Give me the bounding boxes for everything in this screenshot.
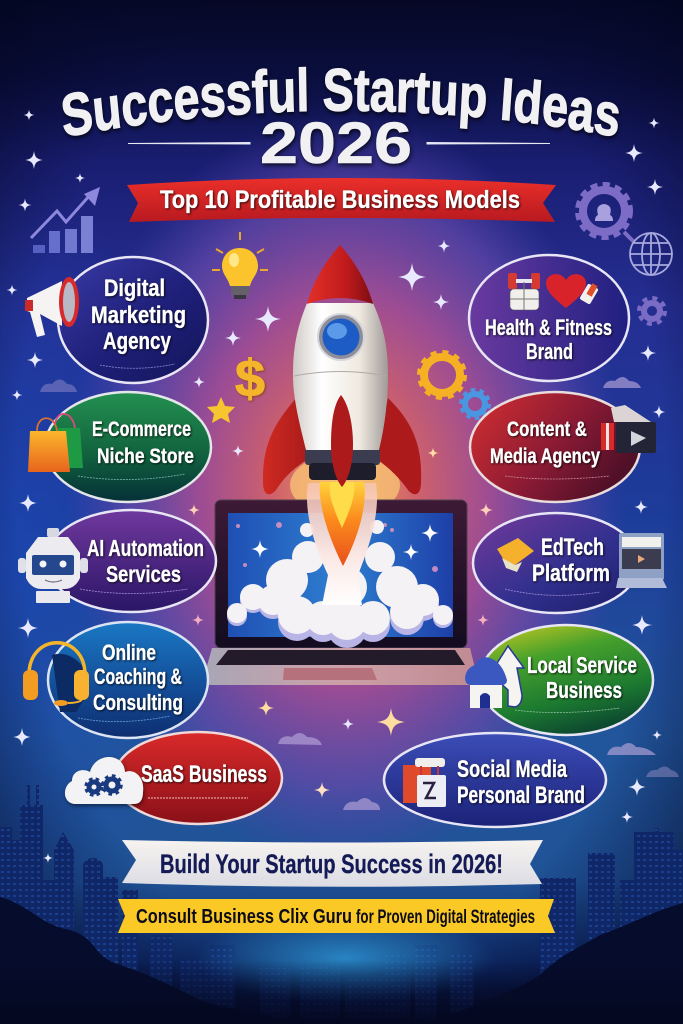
closing ribbon: Build Your Startup Success in 2026! — [160, 849, 503, 879]
item: Social Media Personal Brand — [384, 733, 606, 827]
laptop screen — [215, 500, 467, 648]
rocket — [263, 245, 421, 494]
item: Health & Fitness Brand: Brand — [526, 339, 573, 364]
item: Content & Media Agency: Media Agency — [490, 445, 600, 468]
rocket porthole — [318, 314, 364, 360]
rocket body — [293, 303, 388, 450]
city skyline — [0, 785, 683, 1024]
decorative clouds — [40, 377, 679, 810]
item: EdTech Platform: EdTech — [541, 534, 604, 561]
rocket nose — [307, 245, 373, 304]
glow below banners — [195, 913, 495, 1003]
icon: house — [465, 646, 524, 708]
item: E-Commerce Niche Store: Niche Store — [97, 445, 194, 468]
item: AI Automation Services: Services — [106, 561, 181, 587]
exhaust column — [307, 483, 377, 605]
call to action ribbon: for Proven Digital Strategies — [356, 907, 535, 928]
item: Content & Media Agency: Content & — [507, 418, 587, 441]
rocket nozzle — [305, 447, 380, 465]
item: Local Service Business — [465, 625, 653, 735]
title line: 2026: 2026 — [260, 111, 412, 176]
icon: shopping bags — [28, 414, 83, 472]
icon: dumbbell and heart — [508, 273, 599, 310]
item: Digital Marketing Agency — [25, 257, 208, 383]
icon: blue gear — [461, 390, 489, 418]
item: EdTech Platform — [473, 513, 667, 613]
item: Digital Marketing Agency: Digital — [104, 275, 165, 302]
item: Local Service Business: Local Service — [527, 652, 637, 678]
item: Content & Media Agency — [470, 392, 656, 502]
icon: gold gear — [420, 352, 464, 398]
icon: globe — [630, 233, 672, 275]
item: E-Commerce Niche Store — [28, 392, 211, 502]
item: Health & Fitness Brand — [469, 255, 629, 381]
item: Social Media Personal Brand: Personal Brand — [457, 782, 585, 809]
icon: small gear — [639, 298, 665, 324]
dark hills — [0, 897, 683, 1024]
item: SaaS Business: SaaS Business — [141, 761, 267, 788]
item: Online Coaching & Consulting: Consulting — [93, 690, 183, 715]
item: Social Media Personal Brand: Social Media — [457, 756, 567, 783]
icon: cloud with gears — [65, 757, 143, 804]
item: Online Coaching & Consulting — [23, 622, 208, 738]
closing ribbon — [122, 840, 543, 887]
item: Health & Fitness Brand: Health & Fitness — [485, 315, 612, 340]
rocket fins — [263, 398, 310, 494]
icon: headset — [23, 643, 89, 712]
icon: video screen — [601, 405, 656, 453]
icon: dollar sign: $ — [235, 350, 265, 408]
flame — [320, 482, 365, 566]
item: Online Coaching & Consulting: Coaching & — [94, 664, 182, 689]
subtitle ribbon — [127, 178, 556, 222]
icon: growth chart — [31, 187, 100, 253]
item: EdTech Platform: Platform — [532, 560, 610, 587]
icon: gold star — [207, 397, 235, 423]
item: Online Coaching & Consulting: Online — [102, 640, 156, 665]
item: Digital Marketing Agency: Agency — [103, 328, 172, 355]
item: SaaS Business — [65, 732, 282, 824]
call to action ribbon: Consult Business Clix Guru — [136, 906, 352, 928]
icon: robot — [18, 528, 88, 603]
icon: gear with person — [578, 185, 634, 242]
icon: graduation cap — [497, 538, 534, 572]
rocket centre fin — [331, 395, 353, 487]
title line: Successful Startup Ideas: Successful Startup Ideas — [62, 66, 621, 140]
item: AI Automation Services — [18, 510, 216, 612]
laptop base — [203, 648, 478, 685]
laptop — [203, 500, 478, 685]
decorative stars — [6, 110, 666, 863]
call to action ribbon — [118, 899, 555, 933]
icon: light bulb — [212, 232, 268, 299]
icon: megaphone — [25, 277, 79, 337]
title — [62, 66, 621, 176]
item: E-Commerce Niche Store: E-Commerce — [92, 418, 191, 441]
subtitle ribbon: Top 10 Profitable Business Models — [160, 186, 520, 214]
item: AI Automation Services: AI Automation — [87, 535, 204, 561]
icon: laptop with play — [616, 533, 667, 588]
smoke clouds — [227, 483, 453, 648]
item: Local Service Business: Business — [546, 677, 622, 703]
item: Digital Marketing Agency: Marketing — [91, 302, 186, 329]
icon: social media bag — [403, 758, 446, 807]
